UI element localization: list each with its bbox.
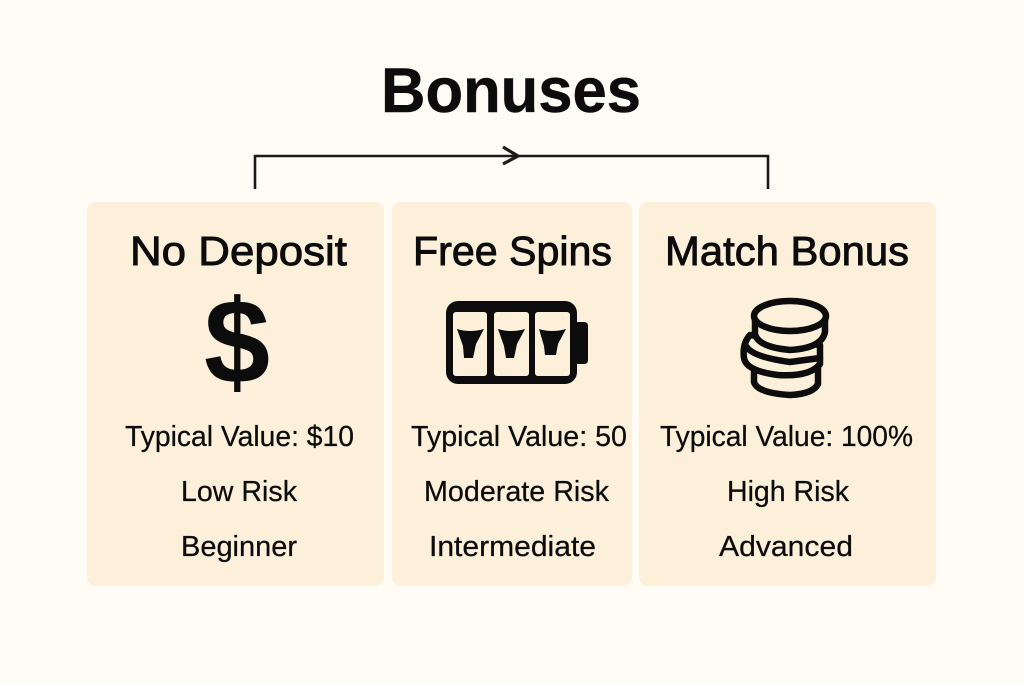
icon: coin stack: [744, 301, 826, 395]
typical value: Typical Value: 50: [411, 421, 627, 453]
icon: slot machine: [446, 301, 588, 384]
risk level: High Risk: [727, 476, 849, 508]
heading: No Deposit: No Deposit: [130, 228, 348, 274]
experience level: Advanced: [719, 531, 853, 563]
panel: Match Bonus: [639, 202, 936, 586]
arrow: connector bracket from No Deposit to Match Bonus: [255, 147, 768, 189]
heading: Match Bonus: Match Bonus: [665, 228, 909, 274]
heading: Free Spins: Free Spins: [413, 228, 612, 274]
title: Bonuses: [381, 56, 641, 126]
experience level: Beginner: [181, 531, 297, 563]
risk level: Moderate Risk: [424, 476, 609, 508]
typical value: Typical Value: $10: [125, 421, 354, 453]
experience level: Intermediate: [429, 531, 596, 563]
panel: No Deposit: [87, 202, 384, 586]
panel: Free Spins: [392, 202, 632, 586]
typical value: Typical Value: 100%: [660, 421, 913, 453]
icon: dollar sign: $: [204, 275, 270, 409]
risk level: Low Risk: [181, 476, 297, 508]
